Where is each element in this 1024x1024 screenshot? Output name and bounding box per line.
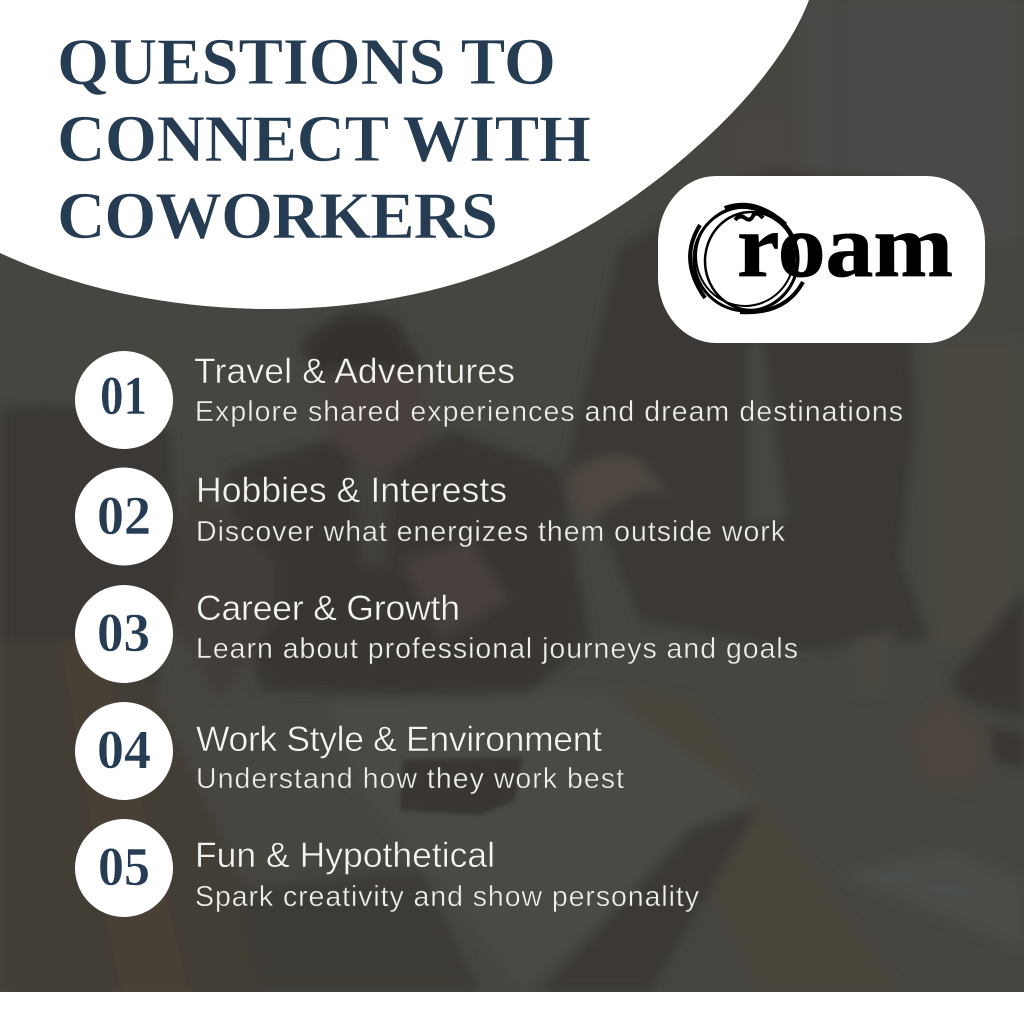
item 01 — [75, 351, 903, 449]
heading 03: Career & Growth — [196, 588, 460, 628]
number badge 02 — [75, 468, 173, 566]
white curved header shape — [0, 0, 809, 309]
number badge 04 — [75, 702, 173, 800]
item 03 — [75, 585, 798, 683]
number 04: 04 — [97, 719, 151, 780]
description 05: Spark creativity and show personality — [195, 881, 700, 913]
item 02 — [75, 468, 786, 566]
item 05 — [75, 819, 700, 917]
heading 01: Travel & Adventures — [194, 351, 515, 391]
description 02: Discover what energizes them outside work — [196, 516, 786, 548]
heading 02: Hobbies & Interests — [196, 470, 507, 510]
number 01: 01 — [100, 365, 147, 426]
number 05: 05 — [98, 836, 150, 897]
description 03: Learn about professional journeys and goals — [196, 633, 798, 665]
number 03: 03 — [97, 602, 150, 663]
description 04: Understand how they work best — [196, 763, 624, 795]
number badge 05 — [75, 819, 173, 917]
title: CONNECT WITH — [57, 102, 591, 176]
description 01: Explore shared experiences and dream destinations — [195, 396, 903, 428]
title: COWORKERS — [57, 179, 498, 253]
title — [57, 25, 591, 253]
heading 05: Fun & Hypothetical — [195, 835, 495, 875]
number badge 03 — [75, 585, 173, 683]
number badge 01 — [75, 351, 173, 449]
icon: logo ink rings — [690, 206, 803, 312]
logo badge: roam — [658, 176, 985, 343]
title: QUESTIONS TO — [57, 25, 556, 99]
heading 04: Work Style & Environment — [196, 719, 602, 759]
logo wordmark: roam — [737, 197, 953, 296]
number 02: 02 — [97, 485, 151, 546]
item 04 — [75, 702, 624, 800]
